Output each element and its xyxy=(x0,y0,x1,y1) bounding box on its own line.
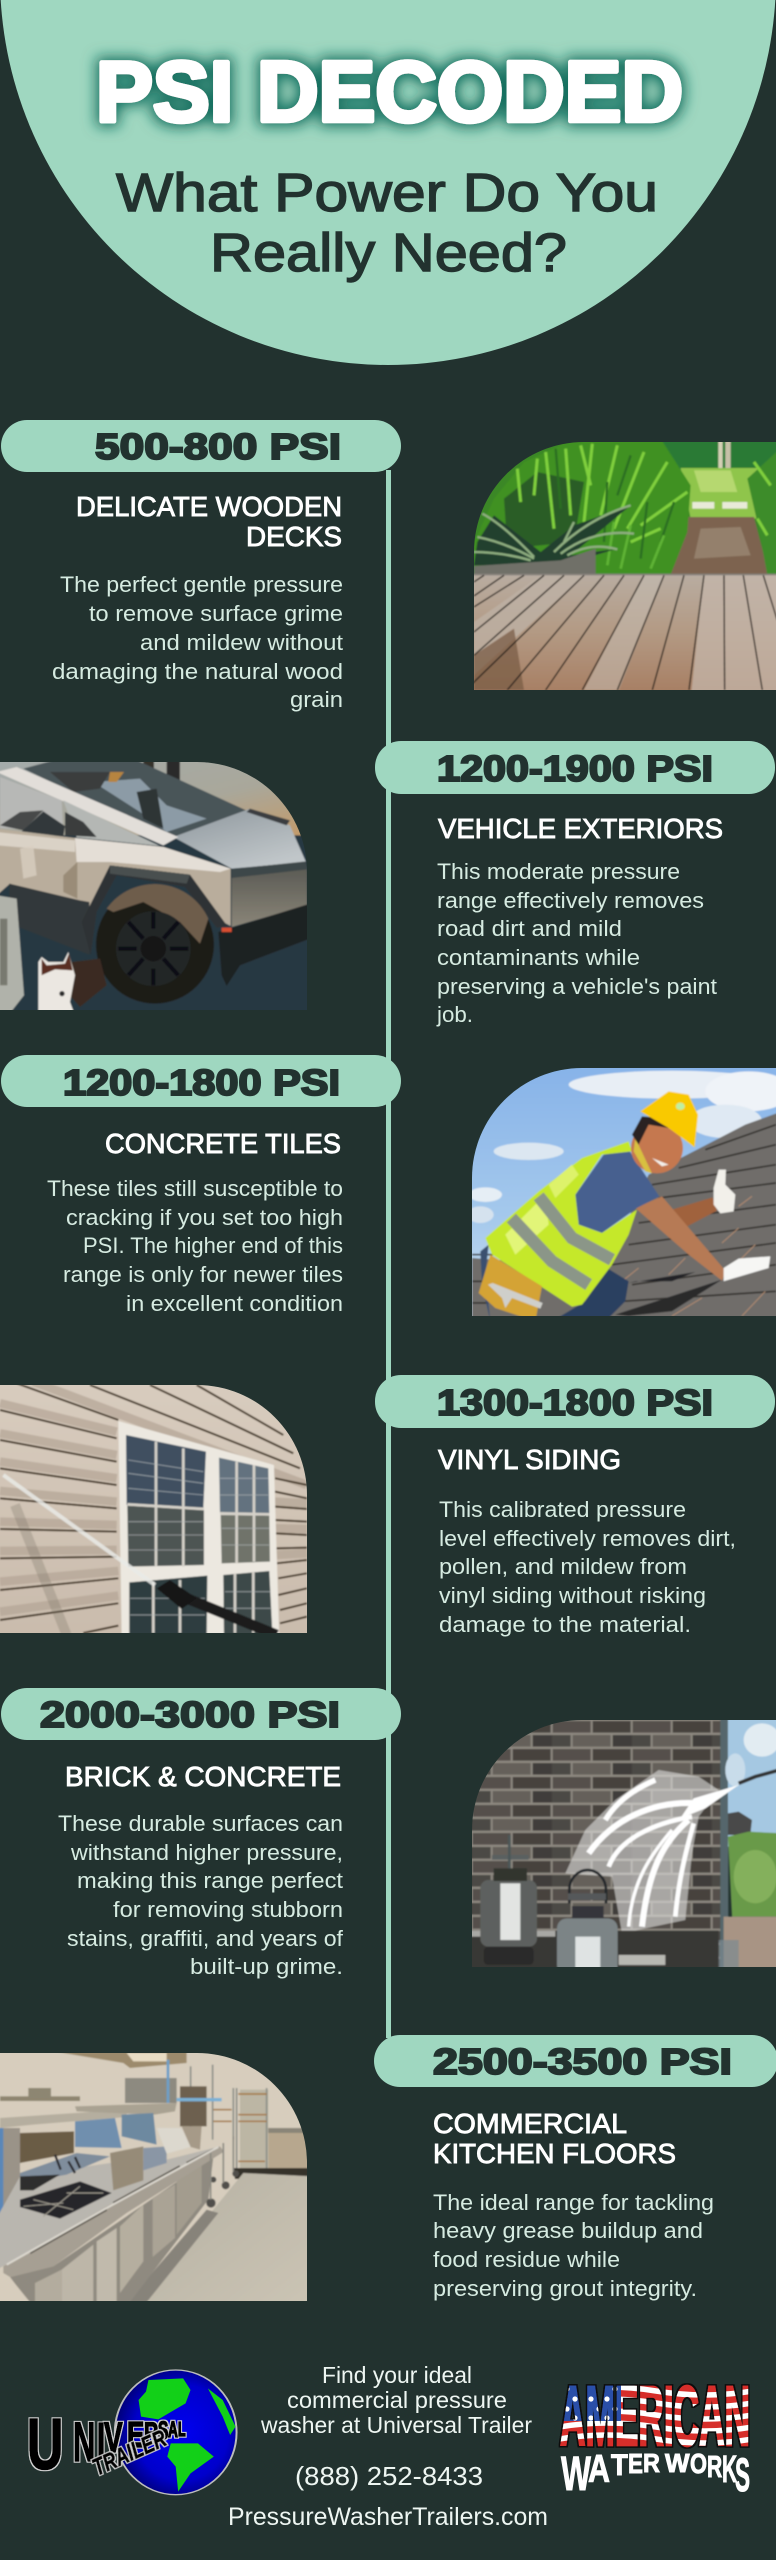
body text: vehicle: This moderate pressure xyxy=(437,859,680,884)
body text: brick xyxy=(58,1811,344,1979)
wordmark: Water Works: R xyxy=(707,2449,722,2484)
panel: vehicle exteriors xyxy=(0,741,775,1027)
body text: decks: The perfect gentle pressure xyxy=(60,572,343,597)
panel: commercial kitchen floors xyxy=(0,2035,776,2310)
body text: vehicle: range effectively removes xyxy=(437,888,704,913)
wordmark: Water Works: K xyxy=(722,2449,737,2491)
body text: brick: stains, graffiti, and years of xyxy=(67,1926,344,1951)
body text: kitchen: The ideal range for tackling xyxy=(433,2190,714,2215)
body text: kitchen xyxy=(433,2190,714,2301)
header semicircle xyxy=(0,0,776,365)
wordmark: Universal: I xyxy=(97,2412,105,2468)
pill: 1200-1900 PSI: 1200-1900 PSI xyxy=(437,748,713,789)
logo: Universal Trailer xyxy=(27,2370,237,2495)
heading: vinyl siding: VINYL SIDING xyxy=(438,1444,621,1475)
photo: house siding and window xyxy=(0,1378,313,1642)
heading: delicate wooden decks: DECKS xyxy=(246,521,342,552)
footer xyxy=(27,2362,750,2531)
wordmark: Universal: R xyxy=(144,2417,158,2450)
wordmark: Universal: A xyxy=(168,2417,178,2442)
pill: 1200-1900 PSI xyxy=(375,741,775,794)
wordmark: Water Works: E xyxy=(628,2449,643,2480)
wordmark: Water Works: R xyxy=(643,2450,660,2478)
heading: commercial kitchen floors xyxy=(433,2108,676,2169)
photo: electric pickup truck xyxy=(0,755,313,1019)
pill: 500-800 PSI xyxy=(1,420,401,472)
call to action text xyxy=(260,2362,532,2438)
body text: brick: These durable surfaces can xyxy=(58,1811,343,1836)
title: PSI DECODED xyxy=(96,45,683,140)
wordmark: Water Works xyxy=(561,2446,750,2501)
body text: vinyl: level effectively removes dirt, xyxy=(439,1526,736,1551)
pill: 2500-3500 PSI: 2500-3500 PSI xyxy=(433,2041,732,2082)
pill: 2000-3000 PSI xyxy=(1,1688,401,1740)
pill: 500-800 PSI: 500-800 PSI xyxy=(95,426,341,467)
panel: concrete tiles xyxy=(1,1055,776,1325)
wordmark: Trailer: TRAILER xyxy=(88,2425,171,2481)
heading: delicate wooden decks xyxy=(76,491,342,552)
body text: kitchen: food residue while xyxy=(433,2247,620,2272)
body text: brick: withstand higher pressure, xyxy=(70,1840,343,1865)
subtitle xyxy=(116,163,658,283)
panel: brick and concrete xyxy=(1,1688,776,1979)
wordmark: Water Works: W xyxy=(561,2446,591,2501)
body text: decks: damaging the natural wood xyxy=(52,659,343,684)
body text: vehicle xyxy=(436,859,718,1027)
phone number: (888) 252-8433 xyxy=(295,2461,483,2491)
body text: tiles xyxy=(47,1176,343,1316)
body text: brick: built-up grime. xyxy=(190,1954,343,1979)
timeline line xyxy=(386,470,391,2038)
body text: kitchen: preserving grout integrity. xyxy=(433,2276,697,2301)
heading: brick and concrete: BRICK & CONCRETE xyxy=(65,1761,341,1792)
heading: commercial kitchen floors: KITCHEN FLOORS xyxy=(433,2138,676,2169)
body text: tiles: These tiles still susceptible to xyxy=(47,1176,343,1201)
wordmark: Universal xyxy=(27,2405,186,2485)
heading: delicate wooden decks: DELICATE WOODEN xyxy=(76,491,342,522)
pill: 2500-3500 PSI xyxy=(374,2035,776,2087)
body text: tiles: in excellent condition xyxy=(126,1291,343,1316)
pill: 1200-1800 PSI: 1200-1800 PSI xyxy=(63,1062,340,1103)
call to action text: washer at Universal Trailer xyxy=(260,2412,532,2438)
pill: 1200-1800 PSI xyxy=(1,1055,401,1107)
body text: tiles: cracking if you set too high xyxy=(66,1205,343,1230)
panel: delicate wooden decks xyxy=(1,420,776,712)
body text: vinyl: pollen, and mildew from xyxy=(439,1554,687,1579)
website: PressureWasherTrailers.com xyxy=(228,2503,548,2531)
photo: roofer on tile roof xyxy=(465,1061,776,1325)
body text: vehicle: contaminants while xyxy=(437,945,640,970)
wordmark: Water Works: T xyxy=(611,2449,628,2482)
subtitle: What Power Do You xyxy=(116,163,658,223)
body text: tiles: range is only for newer tiles xyxy=(63,1262,343,1287)
wordmark: Water Works: O xyxy=(690,2448,707,2480)
body text: decks: grain xyxy=(290,687,343,712)
body text: vinyl: damage to the material. xyxy=(439,1612,691,1637)
icon: globe xyxy=(115,2370,237,2495)
subtitle: Really Need? xyxy=(210,223,567,283)
call to action text: Find your ideal xyxy=(322,2362,472,2388)
body text: vehicle: preserving a vehicle's paint xyxy=(437,974,718,999)
body text: vehicle: road dirt and mild xyxy=(437,916,622,941)
heading: vehicle exteriors: VEHICLE EXTERIORS xyxy=(438,813,723,844)
photo: wooden deck and garden xyxy=(467,435,776,699)
body text: decks xyxy=(52,572,344,712)
body text: vinyl xyxy=(439,1497,736,1637)
pill: 1300-1800 PSI: 1300-1800 PSI xyxy=(437,1382,713,1423)
heading: commercial kitchen floors: COMMERCIAL xyxy=(433,2108,627,2139)
body text: tiles: PSI. The higher end of this xyxy=(83,1233,343,1258)
photo: brick wall being pressure washed xyxy=(465,1713,776,1977)
body text: decks: to remove surface grime xyxy=(89,601,343,626)
body text: brick: for removing stubborn xyxy=(113,1897,343,1922)
pill: 1300-1800 PSI xyxy=(375,1375,775,1428)
body text: brick: making this range perfect xyxy=(77,1868,344,1893)
logo: American Water Works xyxy=(560,2369,750,2501)
wordmark: Water Works: S xyxy=(735,2449,750,2501)
panel: vinyl siding xyxy=(0,1375,775,1642)
wordmark: Universal: U xyxy=(27,2405,63,2485)
photo: commercial kitchen xyxy=(0,2046,313,2310)
heading: concrete tiles: CONCRETE TILES xyxy=(105,1128,341,1159)
wordmark: Water Works: A xyxy=(588,2447,610,2491)
body text: kitchen: heavy grease buildup and xyxy=(433,2218,703,2243)
wordmark: Universal: E xyxy=(127,2415,144,2455)
body text: decks: and mildew without xyxy=(140,630,344,655)
body text: vehicle: job. xyxy=(436,1002,473,1027)
pill: 2000-3000 PSI: 2000-3000 PSI xyxy=(40,1694,340,1735)
call to action text: commercial pressure xyxy=(287,2387,507,2413)
body text: vinyl: vinyl siding without risking xyxy=(439,1583,706,1608)
wordmark: Universal: V xyxy=(104,2413,123,2461)
wordmark: Universal: L xyxy=(178,2418,186,2441)
wordmark: Universal: S xyxy=(158,2417,168,2445)
body text: vinyl: This calibrated pressure xyxy=(439,1497,686,1522)
wordmark: Universal: N xyxy=(73,2410,95,2473)
wordmark: Water Works: W xyxy=(665,2448,690,2478)
